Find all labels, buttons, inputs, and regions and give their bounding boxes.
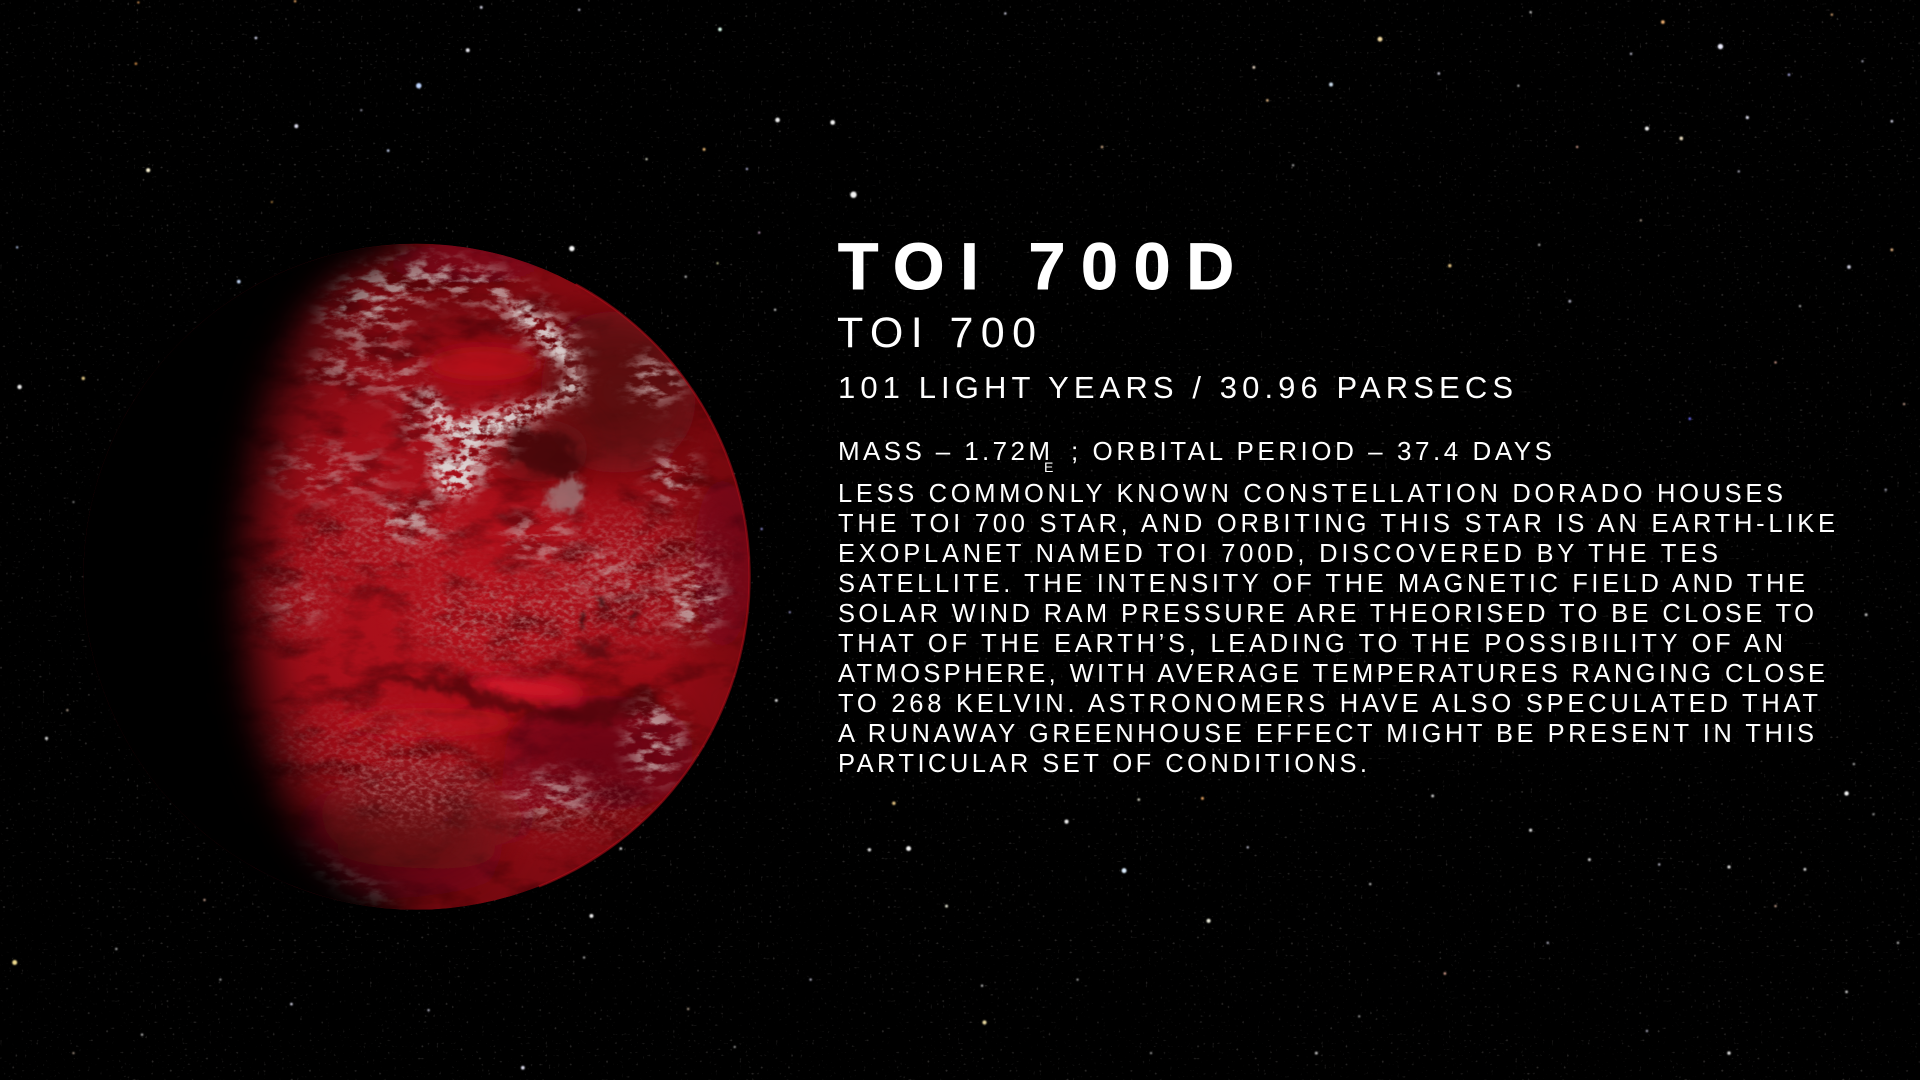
- bright streak: [343, 347, 586, 737]
- star name: TOI 700: [837, 309, 1036, 357]
- description: TO 268 KELVIN. ASTRONOMERS HAVE ALSO SPECULATED THAT: [838, 690, 1818, 718]
- terminator shadow: [84, 244, 448, 910]
- description: SATELLITE. THE INTENSITY OF THE MAGNETIC FIELD AND THE: [838, 570, 1805, 598]
- bright cloud core: [422, 294, 583, 496]
- dark volcanic region: [487, 419, 590, 482]
- mass and orbital period: [838, 436, 1552, 475]
- description: LESS COMMONLY KNOWN CONSTELLATION DORADO HOUSES: [838, 480, 1783, 508]
- distance: 101 LIGHT YEARS / 30.96 PARSECS: [838, 370, 1513, 405]
- planet base: [83, 244, 749, 910]
- gray patch: [547, 475, 588, 514]
- mass and orbital period: ; ORBITAL PERIOD – 37.4 DAYS: [1071, 436, 1552, 466]
- description: PARTICULAR SET OF CONDITIONS.: [838, 750, 1367, 778]
- description: ATMOSPHERE, WITH AVERAGE TEMPERATURES RANGING CLOSE: [838, 660, 1825, 688]
- description: THE TOI 700 STAR, AND ORBITING THIS STAR IS AN EARTH-LIKE: [838, 510, 1835, 538]
- soft haze on mid-disc: [251, 502, 722, 833]
- planet: TOI 700D: [83, 244, 751, 910]
- dark regions: [307, 244, 748, 910]
- cloud systems: [269, 255, 721, 909]
- dark surface band: [355, 428, 661, 725]
- description: A RUNAWAY GREENHOUSE EFFECT MIGHT BE PRESENT IN THIS: [838, 720, 1814, 748]
- mass and orbital period: E: [1044, 459, 1053, 475]
- description: EXOPLANET NAMED TOI 700D, DISCOVERED BY THE TES: [838, 540, 1718, 568]
- description: [838, 480, 1835, 778]
- rim highlight: [539, 284, 750, 887]
- mass and orbital period: MASS – 1.72M: [838, 436, 1050, 466]
- title: TOI 700D: [838, 229, 1234, 303]
- description: SOLAR WIND RAM PRESSURE ARE THEORISED TO BE CLOSE TO: [838, 600, 1814, 628]
- description: THAT OF THE EARTH’S, LEADING TO THE POSSIBILITY OF AN: [838, 630, 1783, 658]
